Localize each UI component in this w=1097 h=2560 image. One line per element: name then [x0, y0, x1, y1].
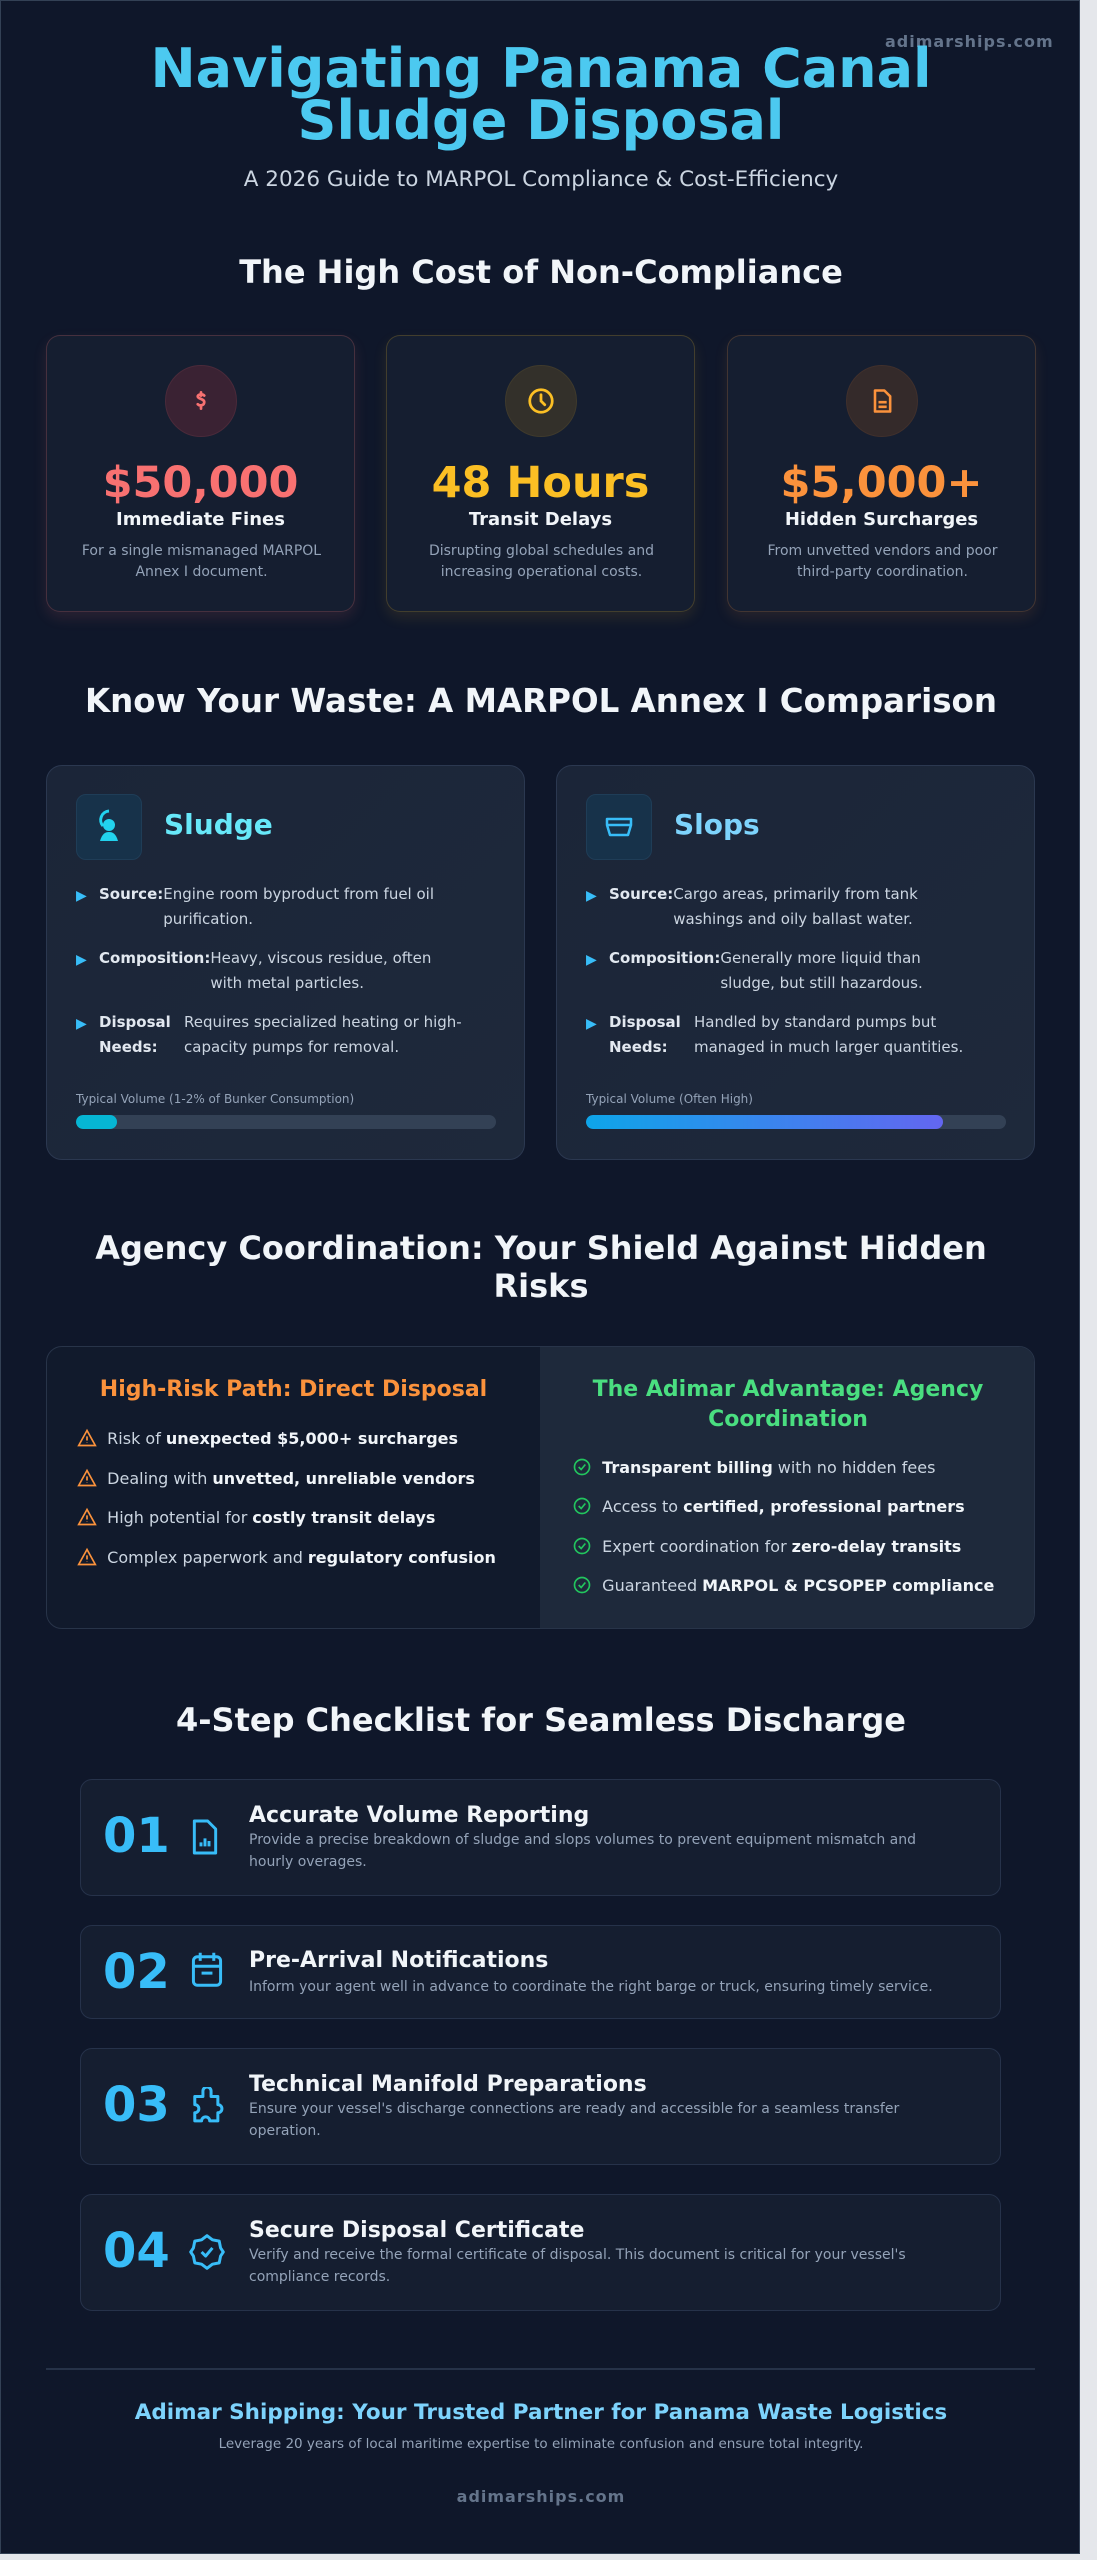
list: risks: Dealing with — [107, 1468, 207, 1488]
list: advantages: zero-delay transits — [792, 1536, 961, 1556]
panel: sludge — [46, 765, 525, 1160]
step 3: operation. — [249, 2123, 321, 2139]
icon: puzzle — [193, 2087, 224, 2122]
icon: sludge — [76, 794, 142, 860]
stat card: surcharges — [727, 335, 1036, 612]
list: advantages: with no hidden fees — [778, 1458, 935, 1476]
right half background — [540, 1347, 1036, 1630]
stat card: fines: $50,000 — [103, 458, 298, 508]
panel: slops: washings and oily ballast water. — [673, 910, 913, 928]
step 2: 02 — [103, 1944, 170, 2000]
stat card: surcharges: From unvetted vendors and poor third-party coordination. — [768, 543, 998, 580]
panel: sludge: Disposal Needs: — [99, 1013, 171, 1056]
step 3: 03 — [103, 2077, 170, 2133]
stat card: delays: Transit Delays — [469, 509, 612, 530]
heading: know your waste: Know Your Waste: A MARPOL Annex I Comparison — [85, 682, 997, 720]
list: risks — [77, 1428, 496, 1566]
subtitle: A 2026 Guide to MARPOL Compliance & Cost-Efficiency — [244, 167, 838, 192]
icon: calendar — [192, 1952, 222, 1987]
list: advantages: MARPOL & PCSOPEP compliance — [702, 1576, 994, 1594]
panel: slops: Typical Volume (Often High) — [586, 1092, 753, 1106]
step 1 — [80, 1779, 1001, 1896]
heading: checklist: 4-Step Checklist for Seamless Discharge — [176, 1701, 906, 1739]
footer heading: Adimar Shipping: Your Trusted Partner for Panama Waste Logistics — [135, 2400, 947, 2425]
bar: slops volume — [586, 1115, 1006, 1129]
heading: high-risk: High-Risk Path: Direct Disposal — [100, 1377, 487, 1402]
panel: sludge: Source: — [99, 885, 163, 903]
list: advantages: Access to — [602, 1496, 678, 1516]
step 4: compliance records. — [249, 2269, 390, 2285]
list: risks: costly transit delays — [252, 1508, 435, 1526]
step 2 — [80, 1925, 1001, 2019]
stat card: delays — [386, 335, 695, 612]
step 1: Accurate Volume Reporting — [249, 1803, 589, 1828]
panel: slops: Handled by standard pumps but — [694, 1013, 936, 1031]
panel: sludge: Engine room byproduct from fuel oil — [163, 885, 434, 903]
heading: adimar advantage — [592, 1377, 983, 1432]
icon: report — [192, 1820, 218, 1854]
heading: adimar advantage: The Adimar Advantage: Agency — [593, 1377, 983, 1402]
step 4: Verify and receive the formal certificate of disposal. This document is critical for your vessel's — [249, 2247, 906, 2263]
list: advantages: Guaranteed — [602, 1576, 697, 1594]
panel: slops: sludge, but still hazardous. — [720, 974, 923, 992]
icon: badge check — [189, 2234, 225, 2270]
panel: sludge: purification. — [163, 910, 253, 928]
panel: slops: Disposal Needs: — [609, 1013, 681, 1056]
panel: slops: Slops — [674, 808, 760, 841]
stat card: surcharges: Hidden Surcharges — [785, 509, 978, 530]
panel: slops: ▶ — [586, 888, 597, 904]
step 1: hourly overages. — [249, 1854, 367, 1870]
step 3 — [80, 2048, 1001, 2165]
step 4 — [80, 2194, 1001, 2311]
panel: sludge: capacity pumps for removal. — [184, 1038, 399, 1056]
stat card: delays: 48 Hours — [432, 458, 649, 508]
heading: adimar advantage: Coordination — [708, 1407, 868, 1432]
panel: sludge: ▶ — [76, 888, 87, 904]
panel: sludge: Typical Volume (1-2% of Bunker Consumption) — [76, 1092, 354, 1106]
heading: high cost: The High Cost of Non-Compliance — [239, 253, 843, 291]
step 3: Technical Manifold Preparations — [249, 2072, 647, 2097]
footer text: Leverage 20 years of local maritime expertise to eliminate confusion and ensure total integrity. — [219, 2436, 863, 2452]
panel: slops: Generally more liquid than — [720, 949, 921, 967]
panel: slops: ▶ — [586, 952, 597, 968]
icon: document — [846, 365, 918, 437]
panel: comparison risk vs advantage — [46, 1346, 1035, 1629]
step 4: 04 — [103, 2223, 170, 2279]
panel: slops: ▶ — [586, 1016, 597, 1032]
step 1: Provide a precise breakdown of sludge and slops volumes to prevent equipment mismatch and — [249, 1832, 916, 1848]
stat card: delays: Disrupting global schedules and increasing operational costs. — [429, 543, 654, 580]
list: risks: regulatory confusion — [308, 1548, 496, 1566]
icon: money — [165, 365, 237, 437]
panel: slops: Source: — [609, 885, 673, 903]
stat card: fines: For a single mismanaged MARPOL Annex I document. — [82, 543, 321, 580]
title — [150, 37, 932, 152]
icon: clock — [505, 365, 577, 437]
stat card: surcharges: $5,000+ — [781, 458, 982, 508]
watermark top: adimarships.com — [885, 32, 1054, 51]
list: risks: Risk of — [107, 1428, 161, 1448]
list: advantages — [574, 1458, 994, 1594]
list: risks: unexpected $5,000+ surcharges — [166, 1428, 458, 1448]
panel: sludge: Sludge — [164, 808, 273, 841]
step 4: Secure Disposal Certificate — [249, 2218, 584, 2243]
footer url: adimarships.com — [457, 2487, 625, 2506]
panel: slops — [556, 765, 1035, 1160]
panel: sludge: with metal particles. — [210, 974, 364, 992]
panel: sludge: Heavy, viscous residue, often — [210, 949, 431, 967]
icon: slops — [586, 794, 652, 860]
list: risks: High potential for — [107, 1508, 247, 1526]
step 2: Pre-Arrival Notifications — [249, 1948, 548, 1973]
panel: slops: Cargo areas, primarily from tank — [673, 885, 918, 903]
step 2: Inform your agent well in advance to coordinate the right barge or truck, ensuring timely service. — [249, 1979, 933, 1995]
list: advantages: certified, professional partners — [683, 1496, 965, 1516]
stat card: fines: Immediate Fines — [116, 509, 285, 530]
title: Sludge Disposal — [298, 89, 784, 152]
list: risks: Complex paperwork and — [107, 1548, 303, 1566]
heading: agency coordination: Agency Coordination: Your Shield Against Hidden Risks — [95, 1229, 987, 1305]
step 3: Ensure your vessel's discharge connections are ready and accessible for a seamless transfer — [249, 2101, 899, 2117]
bar: sludge volume — [76, 1115, 496, 1129]
step 1: 01 — [103, 1808, 170, 1864]
panel: slops: managed in much larger quantities. — [694, 1038, 963, 1056]
list: advantages: Expert coordination for — [602, 1536, 787, 1556]
panel: sludge: Requires specialized heating or high- — [184, 1013, 462, 1031]
panel: sludge: ▶ — [76, 1016, 87, 1032]
panel: slops: Composition: — [609, 949, 720, 967]
panel: sludge: Composition: — [99, 949, 210, 967]
panel: sludge: ▶ — [76, 952, 87, 968]
stat card: fines — [46, 335, 355, 612]
title: Navigating Panama Canal — [150, 37, 932, 100]
list: advantages: Transparent billing — [602, 1458, 773, 1476]
list: risks: unvetted, unreliable vendors — [212, 1468, 475, 1488]
